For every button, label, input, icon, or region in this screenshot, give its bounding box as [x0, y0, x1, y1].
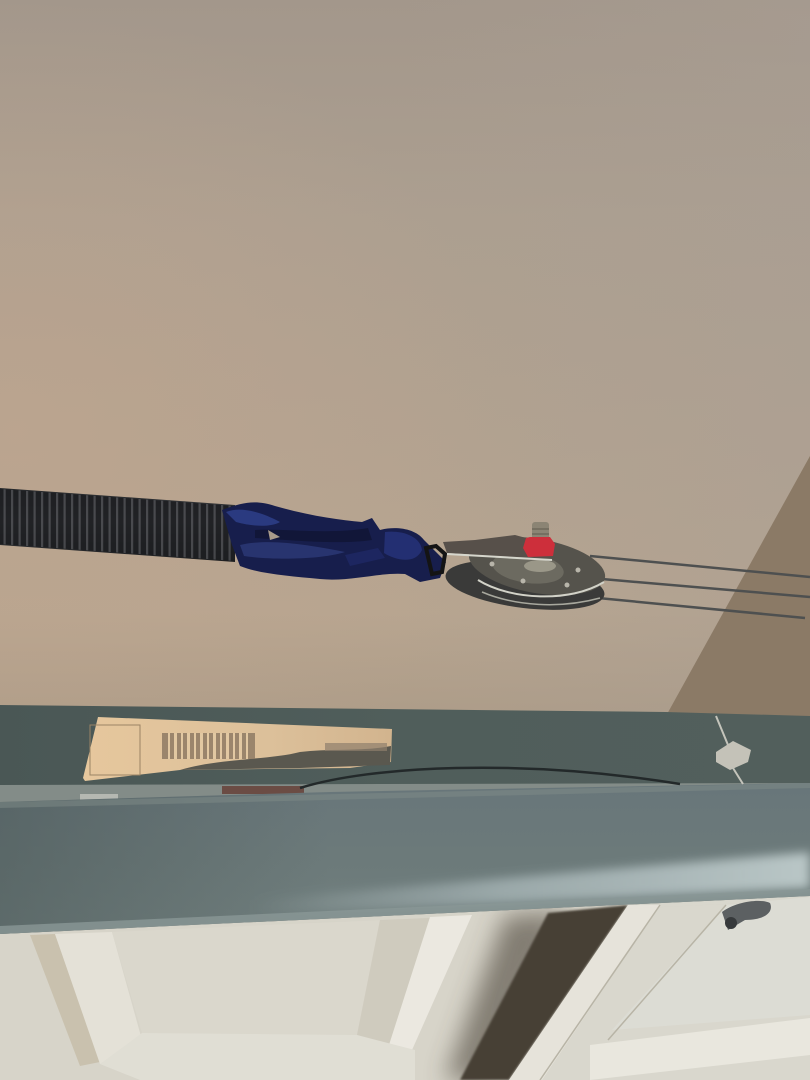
blue fabric wrap — [222, 502, 446, 582]
hook link — [426, 546, 445, 574]
door hardware bolt — [722, 901, 771, 930]
rail lip and wire — [0, 768, 810, 802]
bracket clip — [716, 716, 751, 784]
cables — [590, 556, 810, 618]
barcode label — [83, 717, 392, 781]
steel rail top — [0, 705, 810, 792]
wall corner, right — [666, 456, 810, 716]
shadow gap between doors — [460, 905, 628, 1080]
bracket arm — [443, 535, 552, 559]
steel rail front face — [0, 783, 810, 934]
bolt and red nut — [523, 522, 555, 557]
pulley — [443, 527, 610, 618]
right door panel details — [509, 896, 810, 1080]
ceiling background — [0, 0, 810, 720]
door panels — [0, 896, 810, 1080]
spring coil — [0, 488, 235, 562]
